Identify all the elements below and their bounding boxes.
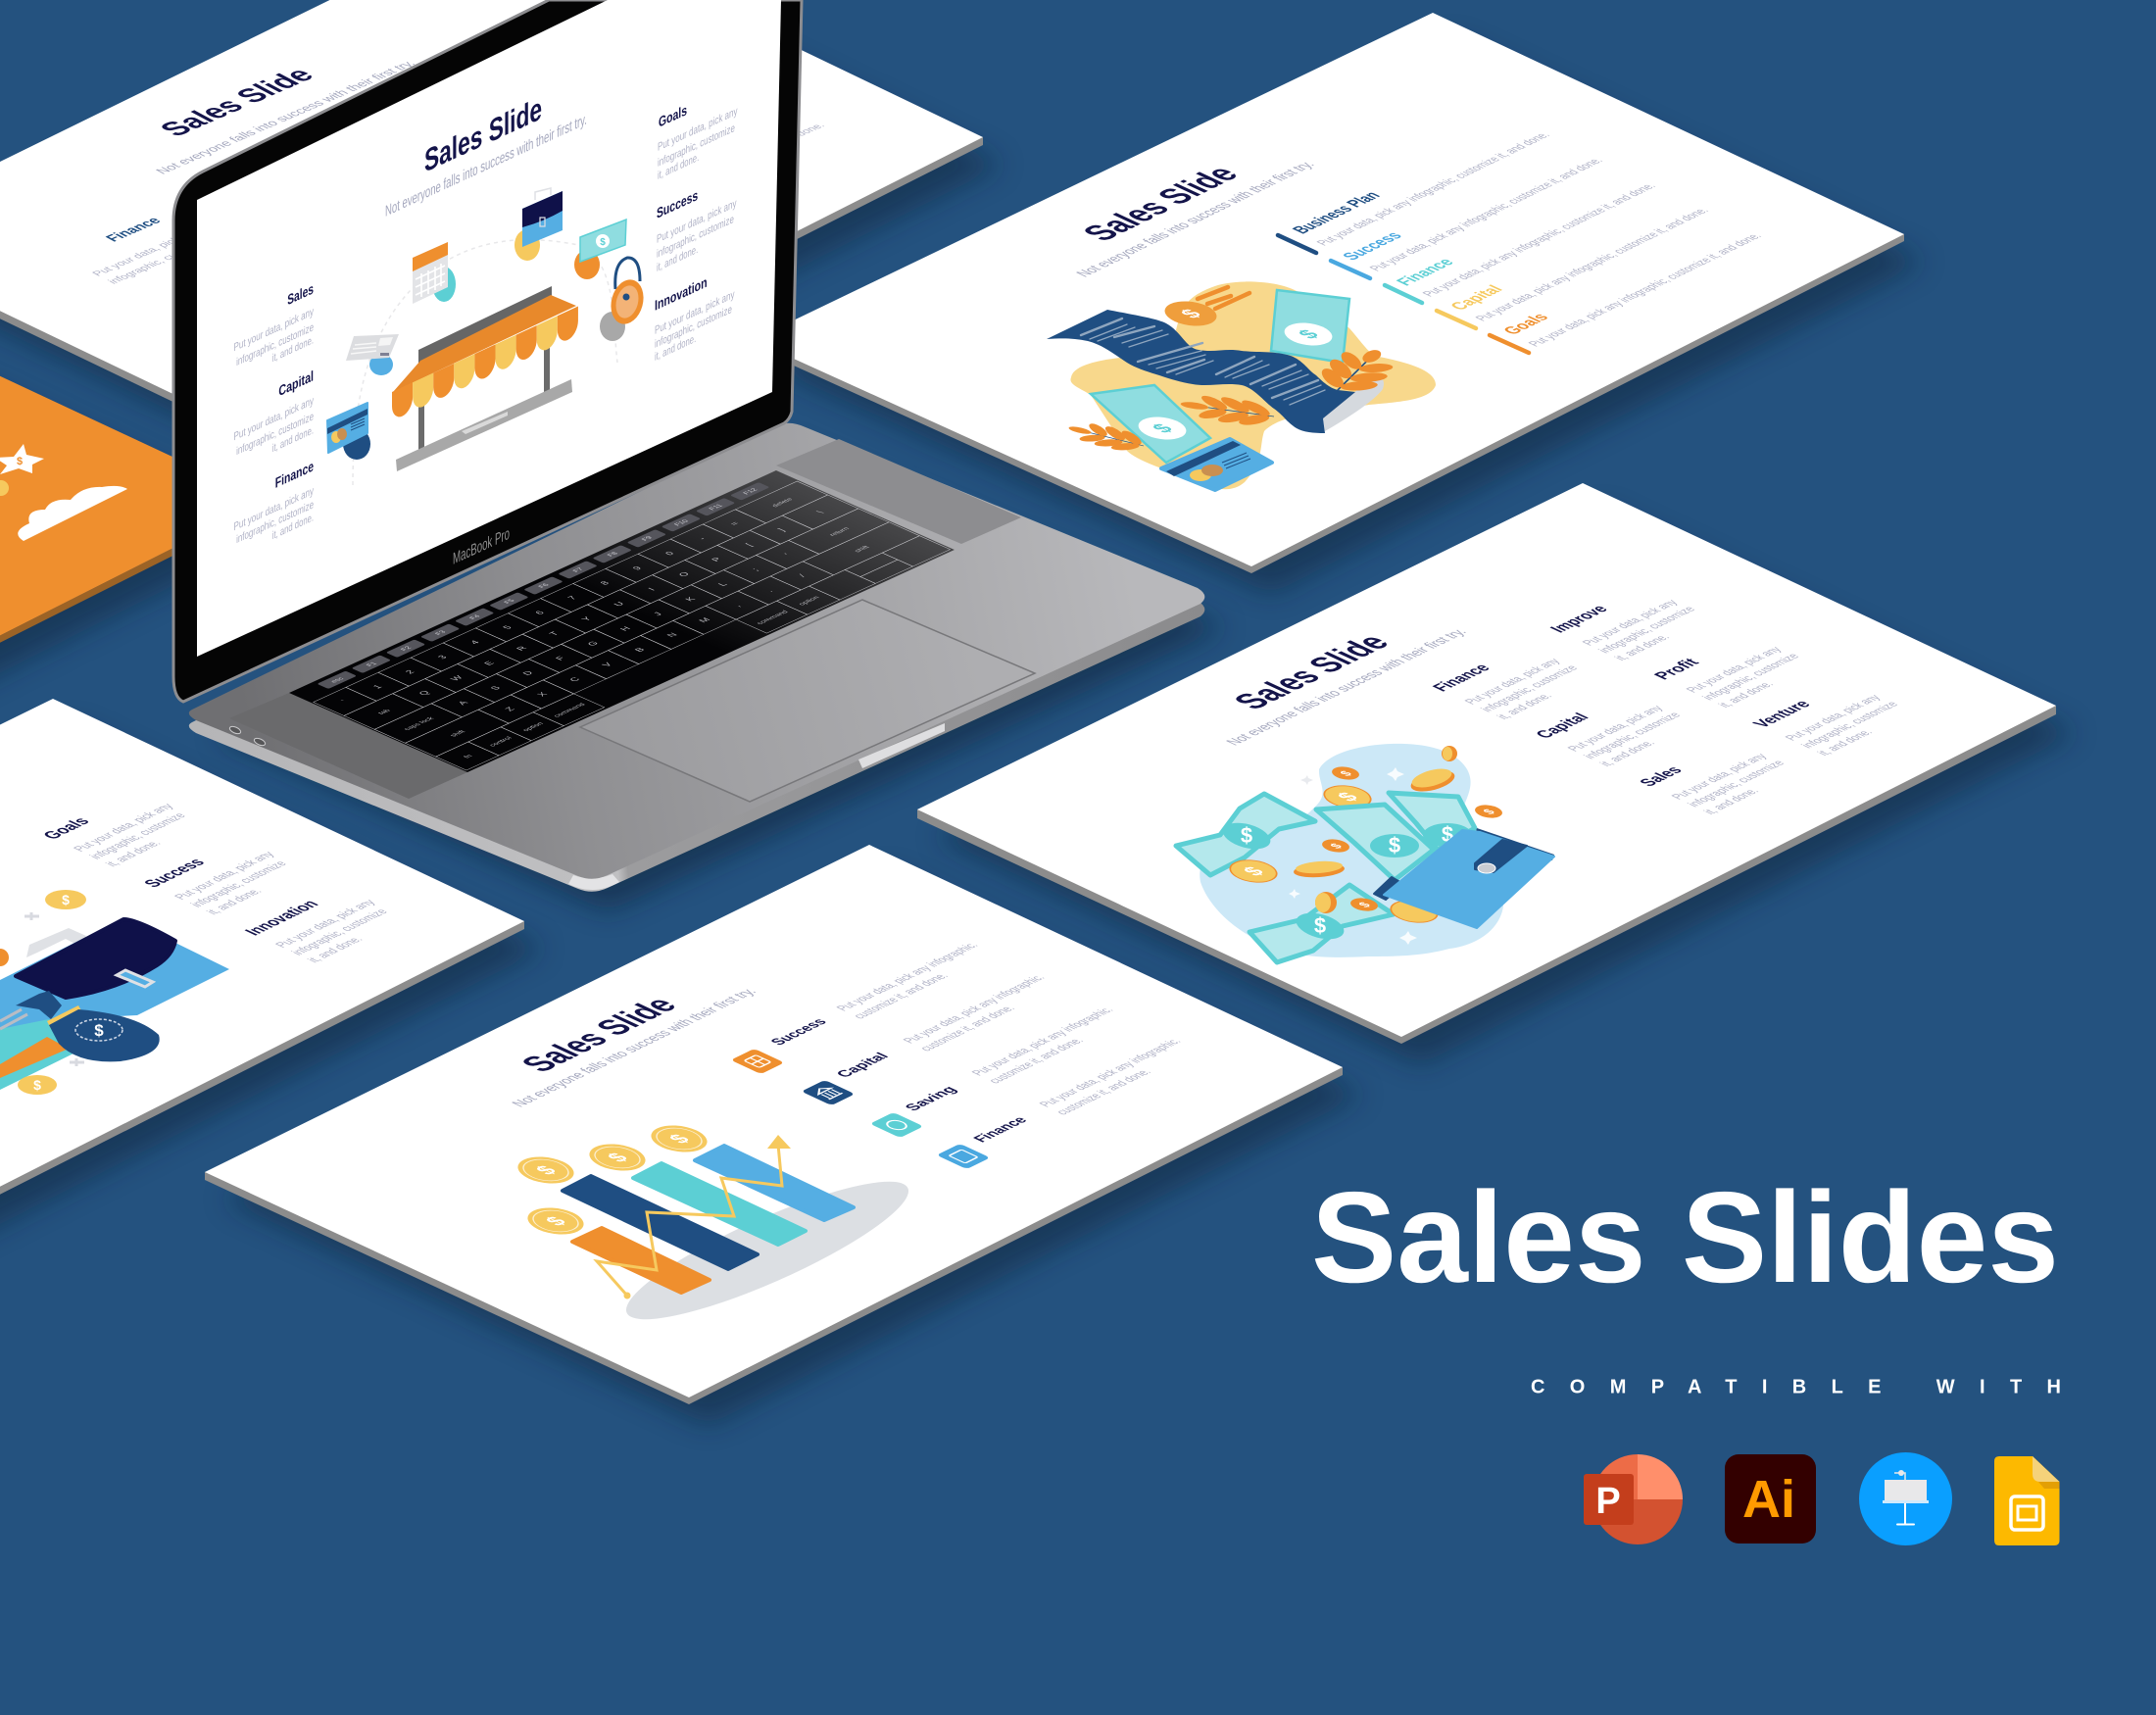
ports — [228, 725, 267, 747]
text block: Sales: it, and done. — [272, 334, 314, 366]
list item: Goals: Put your data, pick any infographic, customize it, and done. — [1525, 231, 1765, 348]
icon: bank check — [346, 334, 399, 375]
keyboard: F12 — [742, 488, 760, 496]
subtitle: wallet slide: Not everyone falls into success with their first try. — [1223, 626, 1471, 748]
text block: Goals: infographic, customize — [658, 122, 735, 170]
icon: credit card — [327, 403, 370, 460]
keyboard: control — [488, 736, 514, 748]
icon: padlock — [600, 258, 648, 341]
text block: Profit: Put your data, pick any — [1683, 645, 1785, 695]
icon: Illustrator: Ai — [1742, 1470, 1795, 1529]
list item: Success: customize it, and done. — [850, 971, 952, 1020]
text block: Success: it, and done. — [203, 886, 265, 916]
text block: Finance: infographic, customize — [106, 237, 216, 285]
list item: Goals: Goals — [1499, 311, 1553, 337]
laptop base side — [189, 436, 1204, 892]
keyboard: return — [828, 526, 852, 537]
text block: Capital: infographic, customize — [236, 411, 314, 459]
text block: Finance: Finance — [275, 458, 314, 491]
panel: top-left slide behind laptop — [0, 0, 1003, 496]
text block: Improve: it, and done. — [1611, 632, 1673, 662]
keyboard: F10 — [673, 519, 691, 527]
text block: Success — [140, 836, 310, 916]
list item: Saving: Saving — [902, 1084, 961, 1113]
text block: Venture: Put your data, pick any — [1782, 693, 1884, 743]
text block: Profit: it, and done. — [1715, 679, 1777, 710]
text block: Capital: Capital — [278, 368, 314, 400]
list item: Finance — [937, 1037, 1185, 1169]
list item: Success: Put your data, pick any infographic. — [833, 941, 982, 1012]
text block: Profit: Profit — [1650, 656, 1704, 682]
text block: Success: Success — [140, 857, 210, 890]
text block: Venture: Venture — [1749, 698, 1815, 730]
list item: Capital: Put your data, pick any infographic, customize it, and done. — [1472, 206, 1712, 322]
text block: Improve — [1546, 582, 1715, 662]
text block: Improve: Improve — [1546, 603, 1612, 635]
speaker grille right — [776, 439, 1021, 544]
text block: Success: infographic, customize — [187, 858, 290, 908]
list item: Finance: Finance — [1393, 256, 1458, 288]
text block: Success: Success — [657, 186, 698, 221]
text block: Goals: Goals — [659, 101, 687, 130]
keyboard — [289, 470, 955, 772]
screen illustration: dashed arc — [353, 240, 617, 485]
keyboard: QWERTYUIOP[]\ — [416, 510, 826, 697]
list item: Finance: Put your data, pick any infographic, customize it, and done. — [1419, 181, 1659, 298]
list item: Finance: customize it, and done. — [1053, 1067, 1154, 1116]
keyboard: option — [798, 596, 821, 607]
panel: orange slide — [0, 330, 286, 712]
icon: calendar — [413, 242, 456, 304]
keyboard: F6 — [537, 583, 551, 589]
list item: Success — [731, 941, 982, 1074]
text block: Capital: Capital — [1532, 711, 1593, 741]
illustration: wallet, bills and coins: $ — [1238, 863, 1270, 879]
text block: Finance: infographic, customize — [1477, 663, 1582, 713]
icon: star: $ — [17, 456, 23, 467]
list item: Capital: Put your data, pick any infographic. — [900, 973, 1049, 1045]
text block: Innovation — [655, 273, 735, 364]
subtitle: chart slide: Not everyone falls into success with their first try. — [509, 986, 760, 1109]
chart: rising bars with coins and arrow: $ — [602, 1150, 634, 1165]
text block: Capital: Put your data, pick any — [1564, 704, 1666, 754]
illustration: wallet, bills and coins: $ — [1314, 913, 1326, 938]
keyboard: F11 — [708, 504, 725, 512]
screen bezel — [173, 0, 802, 702]
chart: rising bars with coins and arrow: $ — [663, 1131, 696, 1147]
text block: Success: Put your data, pick any — [171, 850, 277, 902]
keyboard: ASDFGHJKL;' — [456, 552, 793, 706]
trackpad — [580, 600, 1035, 802]
text block: Finance — [1429, 641, 1597, 721]
text block: Capital — [1532, 688, 1700, 768]
illustration: wallet, bills and coins: $ — [1337, 768, 1355, 778]
text block: Innovation: infographic, customize — [288, 906, 391, 956]
illustration: briefcase and money bag: $ — [33, 1077, 41, 1093]
title: Sales Slides — [1311, 1165, 2059, 1309]
text block: Sales — [1636, 736, 1804, 816]
keyboard: `1234567890-= — [339, 520, 741, 704]
chart: rising bars with coins and arrow: $ — [540, 1213, 572, 1229]
text block: Finance: Finance — [1429, 662, 1494, 694]
text block: Finance: Put your data, pick any — [234, 485, 315, 534]
list item: Business Plan: Put your data, pick any infographic, customize it, and done. — [1313, 130, 1553, 247]
list item: Capital: Capital — [1446, 283, 1507, 313]
text block: Capital: Put your data, pick any — [234, 395, 315, 444]
icon: front corner highlight — [568, 874, 619, 890]
text block: Finance: it, and done. — [272, 512, 314, 543]
text block: Innovation: Put your data, pick any — [271, 898, 378, 950]
keyboard: shift — [449, 730, 467, 738]
text block: Goals: it, and done. — [658, 152, 699, 182]
illustration: receipt, bills and card: $ — [1293, 326, 1325, 342]
illustration: receipt, bills and card — [1047, 281, 1436, 490]
icon: briefcase — [514, 188, 563, 261]
icon: Google Slides — [1994, 1456, 2060, 1545]
text block: Capital: infographic, customize — [1580, 710, 1685, 760]
text block: Innovation: Innovation — [241, 898, 323, 938]
keyboard: F3 — [434, 630, 448, 636]
illustration: wallet, bills and coins — [1176, 744, 1554, 962]
illustration: briefcase and money bag: $ — [94, 1021, 104, 1040]
list item: Capital: customize it, and done. — [916, 1004, 1018, 1053]
text block: Finance — [90, 122, 828, 285]
chart: rising bars with coins and arrow — [507, 1120, 941, 1335]
text block: Sales: infographic, customize — [236, 321, 314, 369]
illustration: receipt, bills and card: $ — [1147, 420, 1179, 436]
keyboard: esc — [329, 676, 346, 684]
keyboard: F7 — [572, 567, 585, 573]
text block: Success — [657, 186, 737, 274]
keyboard: shift — [854, 545, 871, 554]
icon: bill: $ — [600, 237, 606, 248]
text block: Profit — [1650, 629, 1819, 710]
icon: PowerPoint — [1584, 1454, 1683, 1544]
keyboard: command — [553, 703, 587, 718]
text block: Venture: it, and done. — [1814, 727, 1876, 758]
heading: chart slide title: Sales Slide — [513, 993, 686, 1077]
text block: Profit: infographic, customize — [1698, 652, 1803, 702]
panel: sales slide with bar chart (bottom center) — [205, 845, 1362, 1425]
keyboard: F9 — [641, 536, 655, 542]
illustration: wallet, bills and coins: $ — [1241, 823, 1252, 848]
list item: Capital: Capital — [833, 1051, 893, 1080]
keyboard: tab — [377, 709, 392, 715]
text block: Goals: Put your data, pick any — [658, 105, 738, 154]
list item: Business Plan: Business Plan — [1289, 189, 1385, 236]
text block: Goals: it, and done. — [102, 838, 164, 868]
text block: Capital — [234, 368, 315, 459]
keyboard: delete — [771, 497, 795, 508]
list item: Success: Success — [1339, 229, 1406, 263]
illustration: wallet, bills and coins: $ — [1442, 822, 1453, 847]
text block: Finance: it, and done. — [1494, 691, 1555, 721]
illustration: wallet, bills and coins: $ — [1327, 841, 1346, 851]
illustration: briefcase and money bag: $ — [62, 892, 70, 907]
list item: Saving: Put your data, pick any infographic. — [968, 1005, 1117, 1077]
list item: Success: Success — [767, 1016, 831, 1048]
icon: bill — [574, 220, 626, 279]
text block: Sales: it, and done. — [1700, 786, 1762, 816]
text block: Venture — [1749, 677, 1918, 758]
illustration: wallet, bills and coins: $ — [1389, 833, 1400, 858]
icon: coin — [0, 480, 9, 496]
keyboard: F5 — [503, 599, 516, 605]
text block: Finance: Put your data, pick any — [1461, 657, 1563, 707]
subtitle: screen: Not everyone falls into success with their first try. — [385, 110, 587, 220]
heading: receipt slide title: Sales Slide — [1074, 162, 1248, 246]
icon: Illustrator — [1725, 1454, 1816, 1544]
text block: Innovation: Put your data, pick any — [655, 288, 735, 337]
text block: Finance: infographic, customize — [236, 499, 314, 547]
front lip — [858, 723, 945, 768]
panel: briefcase slide (bottom left) — [0, 699, 544, 1280]
text block: Innovation: infographic, customize — [655, 304, 732, 351]
icon: cloud — [18, 486, 127, 541]
illustration: wallet, bills and coins: $ — [1355, 900, 1374, 909]
text block: Success: Put your data, pick any — [657, 197, 737, 246]
text block: Goals: Put your data, pick any — [70, 802, 176, 854]
text block: Sales — [234, 280, 315, 369]
illustration: wallet, bills and coins: $ — [1332, 789, 1364, 805]
text block: Improve: infographic, customize — [1594, 605, 1699, 655]
illustration: wallet, bills and coins: $ — [1480, 807, 1498, 816]
subtitle: top-left slide: Not everyone falls into success with their first try. — [152, 59, 418, 175]
illustration: briefcase and money bag — [0, 890, 229, 1095]
icon: Keynote — [1859, 1452, 1952, 1545]
heading: screen title: Sales Slide — [424, 91, 542, 180]
keyboard: caps lock — [403, 716, 436, 731]
text block: Innovation: it, and done. — [304, 934, 366, 964]
text block: Innovation: Innovation — [655, 273, 708, 314]
icon: PowerPoint: P — [1595, 1481, 1621, 1522]
text block: Finance: Put your data, pick any — [90, 227, 203, 277]
text block: Success: infographic, customize — [657, 214, 734, 261]
keyboard: option — [521, 721, 546, 732]
laptop deck — [189, 423, 1204, 879]
text block: Goals — [39, 788, 209, 868]
keyboard: ZXCVBNM,./ — [503, 573, 808, 712]
list item: Finance: Finance — [970, 1115, 1032, 1145]
text block: Finance: it, and done. — [764, 122, 828, 150]
text block: Improve: Put your data, pick any — [1579, 598, 1681, 648]
list item: Capital — [802, 973, 1049, 1105]
text block: Capital: it, and done. — [1596, 738, 1658, 768]
illustration: receipt, bills and card: $ — [1175, 306, 1207, 321]
text block: Goals: Goals — [39, 815, 94, 842]
text block: Sales: Sales — [1636, 764, 1687, 789]
text block: Finance: Finance — [103, 216, 165, 244]
keyboard: command — [756, 610, 790, 625]
keyboard: F4 — [468, 614, 482, 620]
laptop: MacBook Pro — [173, 0, 1225, 911]
icon: star — [0, 444, 44, 474]
list item: Success: Put your data, pick any infographic, customize it, and done. — [1366, 156, 1606, 272]
brand label: MacBook Pro — [453, 525, 510, 568]
screen illustration: storefront — [392, 286, 578, 471]
text block: Venture: infographic, customize — [1797, 700, 1902, 750]
keyboard: F8 — [607, 552, 620, 558]
panel: sales slide with receipt (top right) — [753, 13, 1924, 594]
chart: rising bars with coins and arrow: $ — [530, 1162, 563, 1178]
text block: Success: it, and done. — [657, 244, 698, 274]
panel: sales slide with wallet (middle right) — [917, 483, 2076, 1064]
list item: Saving: customize it, and done. — [985, 1036, 1087, 1085]
text block: Capital: it, and done. — [272, 424, 314, 456]
text block: Finance — [234, 458, 315, 547]
screen — [197, 0, 781, 657]
keyboard: F2 — [400, 646, 414, 652]
text block: Goals — [658, 101, 738, 182]
list item: Finance: Put your data, pick any infographic. — [1036, 1037, 1185, 1108]
text block: Innovation — [241, 884, 411, 964]
text block: Sales: Sales — [287, 280, 314, 309]
text block: Sales: Put your data, pick any — [234, 306, 315, 355]
subtitle: receipt slide: Not everyone falls into success with their first try. — [1073, 159, 1319, 279]
heading: wallet slide title: Sales Slide — [1225, 630, 1398, 714]
text block: Goals: infographic, customize — [86, 810, 189, 860]
text block: Innovation: it, and done. — [655, 333, 696, 364]
speaker grille left — [229, 693, 467, 799]
heading: top-left slide title: Sales Slide — [151, 63, 321, 140]
keyboard: fn — [463, 754, 474, 760]
list item: Saving — [870, 1005, 1117, 1138]
subheading: compatible with: COMPATIBLE WITH — [1531, 1376, 2061, 1397]
text block: Sales: Put your data, pick any — [1668, 752, 1770, 802]
text block: Sales: infographic, customize — [1684, 759, 1788, 808]
keyboard: F1 — [366, 662, 379, 667]
